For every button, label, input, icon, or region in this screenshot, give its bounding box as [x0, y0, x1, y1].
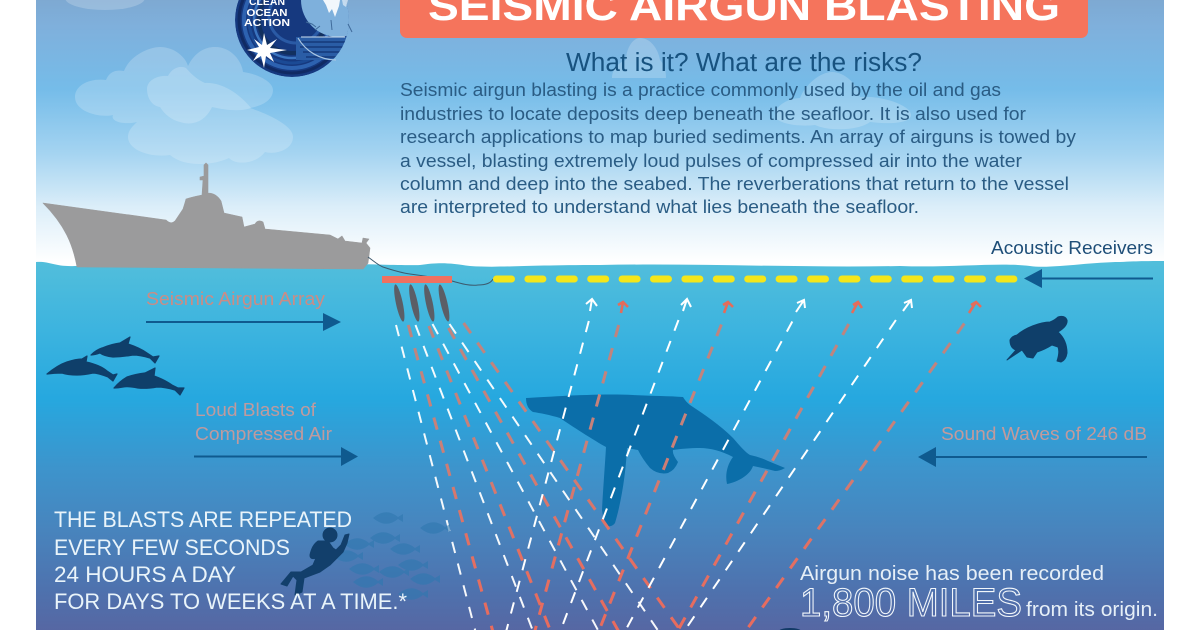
- arrow: acoustic receivers: [1024, 269, 1153, 288]
- description paragraph: column and deep into the seabed. The reverberations that return to the vessel: [400, 173, 1069, 194]
- white returning sound arrows: [506, 299, 912, 630]
- description paragraph: a vessel, blasting extremely loud pulses of compressed air into the water: [400, 150, 1022, 171]
- description paragraph: Seismic airgun blasting is a practice commonly used by the oil and gas: [400, 79, 1001, 100]
- logo wordmark: OCEAN: [246, 7, 288, 19]
- airgun noise distance callout: 1,800 MILES: [800, 581, 1022, 625]
- repeated blasts statement: 24 HOURS A DAY: [54, 562, 236, 587]
- description paragraph: are interpreted to understand what lies beneath the seafloor.: [400, 196, 919, 217]
- airgun noise distance callout: Airgun noise has been recorded: [800, 563, 1104, 585]
- repeated blasts statement: [54, 507, 407, 614]
- ship silhouette: [43, 163, 370, 269]
- labels and arrows: sound waves: Sound Waves of 246 dB: [941, 424, 1147, 444]
- red arrowheads: [618, 302, 981, 313]
- logo splash: [323, 0, 348, 17]
- logo wordmark: ACTION: [244, 17, 290, 29]
- acoustic receiver line: [496, 276, 1014, 282]
- whale: [526, 394, 785, 526]
- red outgoing sound dashes: [408, 323, 682, 630]
- seabed creature fragment: [780, 628, 800, 630]
- airgun noise distance callout: [800, 563, 1158, 625]
- fish school: [333, 512, 450, 600]
- red returning sound arrows: [535, 324, 964, 630]
- labels and arrows: loud blasts: Loud Blasts of: [195, 399, 317, 420]
- ocean: [36, 261, 1164, 630]
- labels and arrows: seismic airgun array: [146, 289, 341, 331]
- logo: Clean Ocean Action: [235, 0, 352, 77]
- airgun array bar: [382, 276, 452, 283]
- acoustic receivers label: Acoustic Receivers: [991, 238, 1153, 258]
- title banner: [400, 0, 1088, 38]
- logo star: [247, 33, 287, 68]
- airgun noise distance callout: from its origin.: [1026, 599, 1158, 621]
- subtitle: What is it? What are the risks?: [566, 49, 922, 77]
- white outgoing sound dashes: [396, 324, 659, 630]
- logo birds: [306, 20, 352, 32]
- sea turtle: [1007, 316, 1067, 362]
- repeated blasts statement: EVERY FEW SECONDS: [54, 535, 290, 560]
- description paragraph: industries to locate deposits deep beneath the seafloor. It is also used for: [400, 103, 1026, 124]
- logo wordmark: [244, 0, 290, 26]
- clouds: [65, 0, 911, 164]
- labels and arrows: loud blasts: [194, 399, 358, 466]
- labels and arrows: seismic airgun array: Seismic Airgun Array: [146, 289, 325, 309]
- scuba diver: [281, 528, 349, 595]
- labels and arrows: sound waves: [918, 424, 1147, 467]
- labels and arrows: loud blasts: Compressed Air: [195, 423, 332, 444]
- tow cable: [368, 257, 493, 285]
- description paragraph: research applications to map buried sediments. An array of airguns is towed by: [400, 126, 1077, 147]
- sky background: [36, 0, 1164, 270]
- airguns: [392, 284, 452, 322]
- dolphins: [47, 337, 184, 395]
- repeated blasts statement: FOR DAYS TO WEEKS AT A TIME.*: [54, 589, 407, 614]
- description paragraph: [400, 79, 1077, 217]
- repeated blasts statement: THE BLASTS ARE REPEATED: [54, 507, 352, 532]
